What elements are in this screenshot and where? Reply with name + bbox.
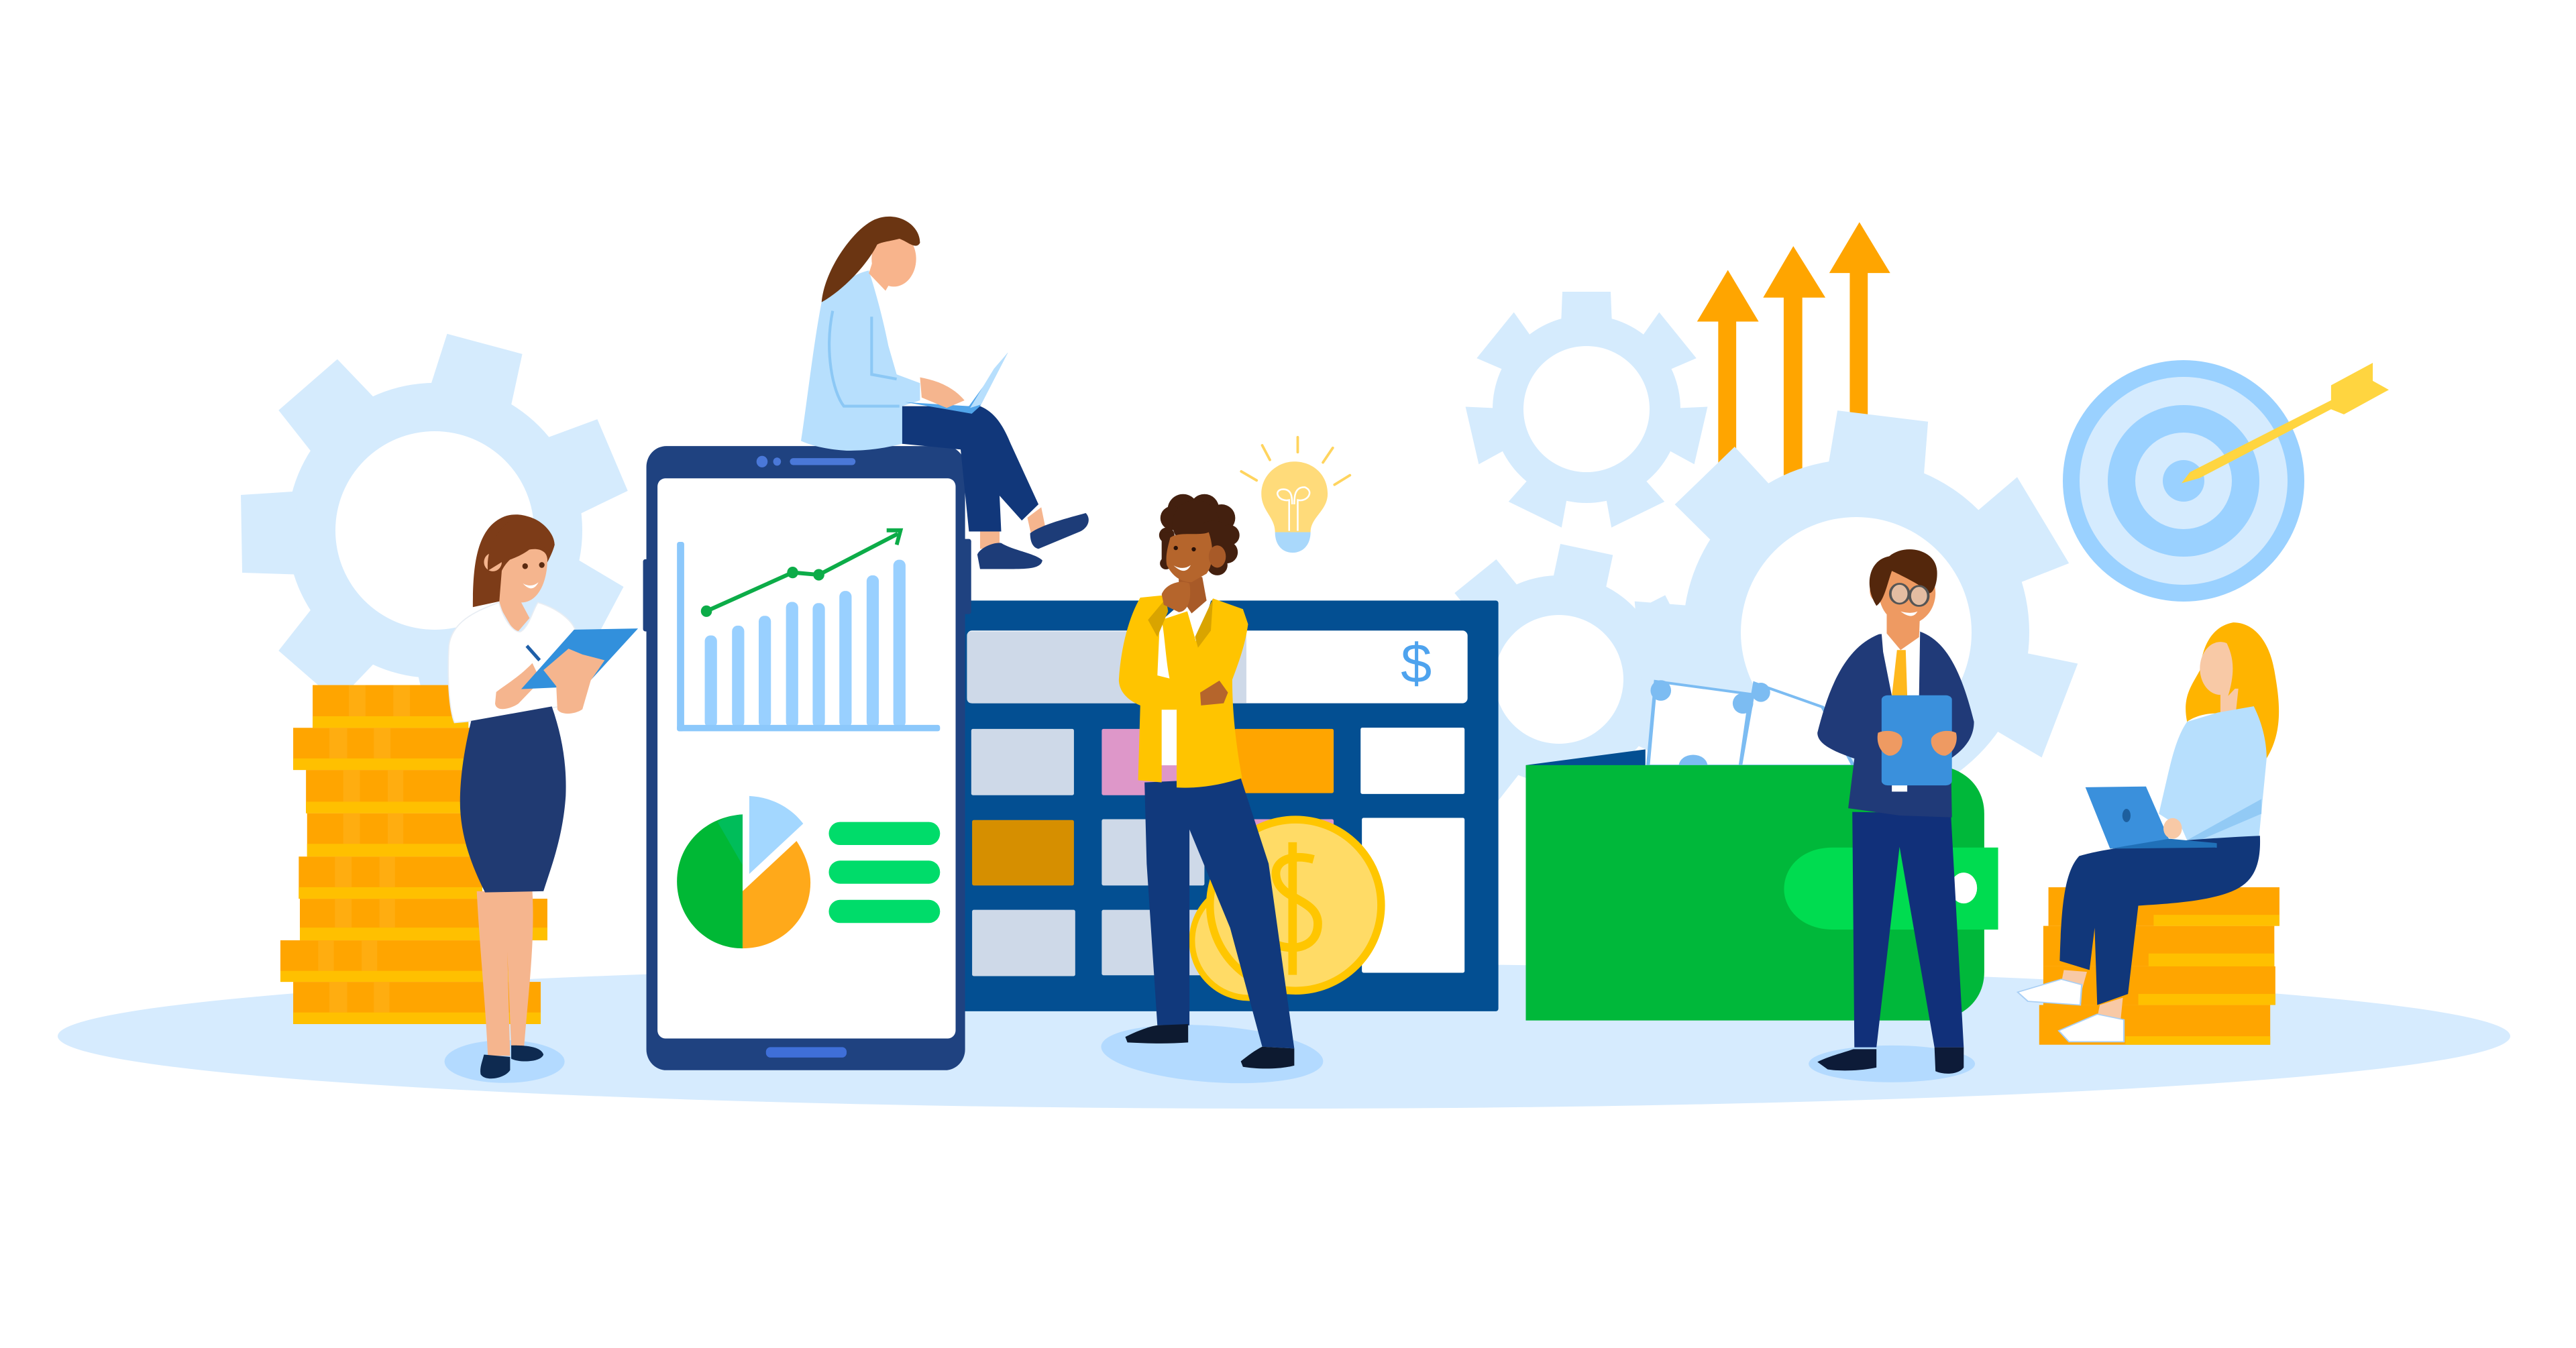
gear: large left: [241, 333, 629, 728]
pie chart: [677, 796, 810, 948]
calculator display: [967, 630, 1468, 704]
growth arrows: [1697, 222, 1890, 475]
cash notes: [1648, 680, 1854, 777]
gear: large right: [1635, 410, 2078, 855]
gear: lower middle: [1426, 544, 1690, 815]
person: woman with tablet: [445, 514, 638, 1083]
gear: upper middle: [1466, 292, 1707, 528]
person: thinking man in yellow jacket: [1099, 494, 1325, 1090]
target with arrow: [2063, 360, 2389, 602]
person: man with tablet: [1809, 549, 1975, 1082]
pie legend: [828, 822, 940, 923]
dollar coins: [1192, 820, 1381, 998]
bar chart: [677, 530, 940, 731]
calculator keys: [971, 728, 1464, 976]
coin stack: left: [280, 685, 547, 1024]
curly hair: [1159, 494, 1240, 575]
ground ellipse: [58, 964, 2510, 1109]
person: seated blonde woman with laptop: [2018, 622, 2279, 1042]
wallet: [1525, 680, 1998, 1021]
phone: [643, 446, 971, 1070]
person: woman on phone with laptop: [801, 217, 1089, 569]
coin stack: right: [2039, 887, 2279, 1045]
calculator: [957, 601, 1499, 1011]
light bulb: [1241, 437, 1350, 553]
calculator display: $: [1401, 632, 1432, 694]
